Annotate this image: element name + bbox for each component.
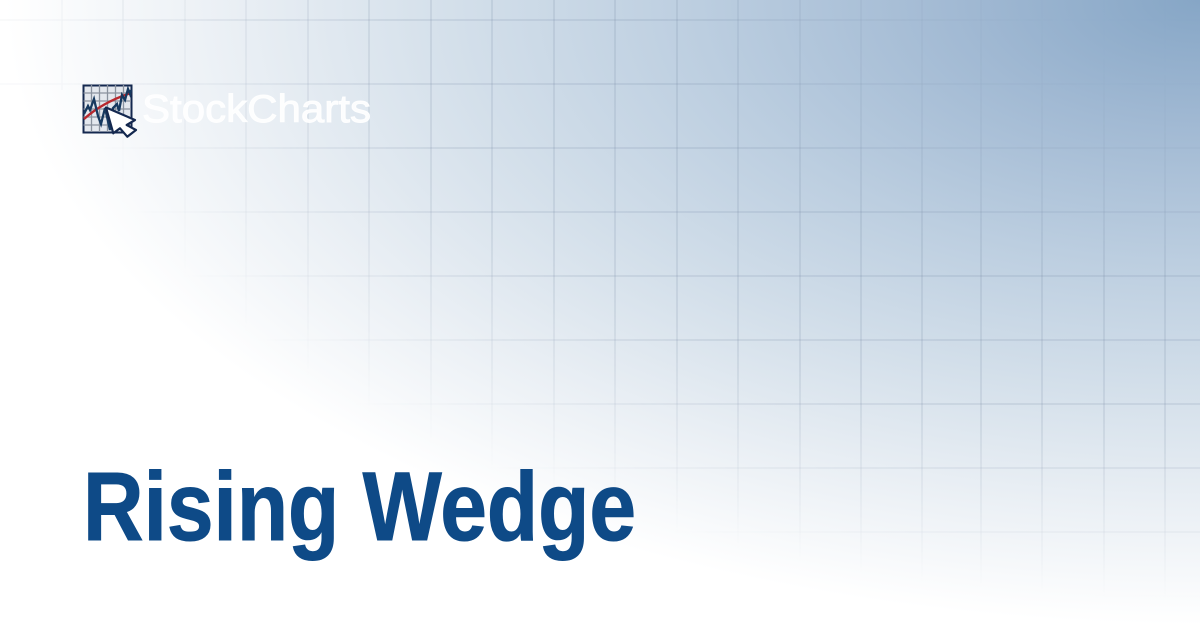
- top-left grid remnant: [0, 0, 123, 40]
- logo: StockCharts: [82, 84, 371, 138]
- background grid: [122, 0, 1200, 554]
- title: Rising Wedge: [83, 452, 636, 561]
- logo wordmark: StockCharts: [142, 88, 371, 131]
- icon: chart with cursor: [84, 85, 136, 137]
